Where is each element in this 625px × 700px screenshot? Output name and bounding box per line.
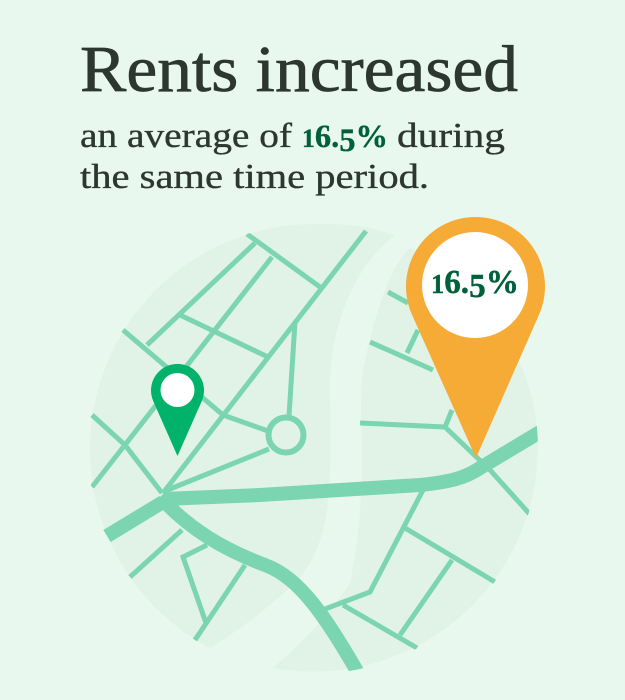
icon: orange map pin bbox=[406, 217, 545, 458]
icon: green map pin bbox=[151, 364, 204, 456]
map land: right bbox=[273, 248, 538, 672]
highlighted percentage: % bbox=[355, 119, 388, 155]
subtitle bbox=[80, 116, 505, 196]
roundabout bbox=[268, 418, 304, 452]
pin value: 5 bbox=[469, 268, 486, 305]
map land: left bbox=[90, 224, 395, 648]
pin value: % bbox=[486, 264, 519, 301]
minor roads bbox=[92, 231, 535, 648]
major roads bbox=[107, 429, 545, 685]
subtitle: the same time period. bbox=[80, 157, 429, 196]
map bbox=[90, 224, 545, 685]
subtitle: during bbox=[397, 116, 505, 155]
title: Rents increased bbox=[80, 33, 518, 106]
highlighted percentage: 16. bbox=[302, 119, 340, 155]
infographic bbox=[80, 44, 545, 671]
subtitle: an average of bbox=[80, 116, 292, 155]
pin value: 16. bbox=[431, 264, 470, 301]
highlighted percentage: 5 bbox=[339, 123, 355, 159]
